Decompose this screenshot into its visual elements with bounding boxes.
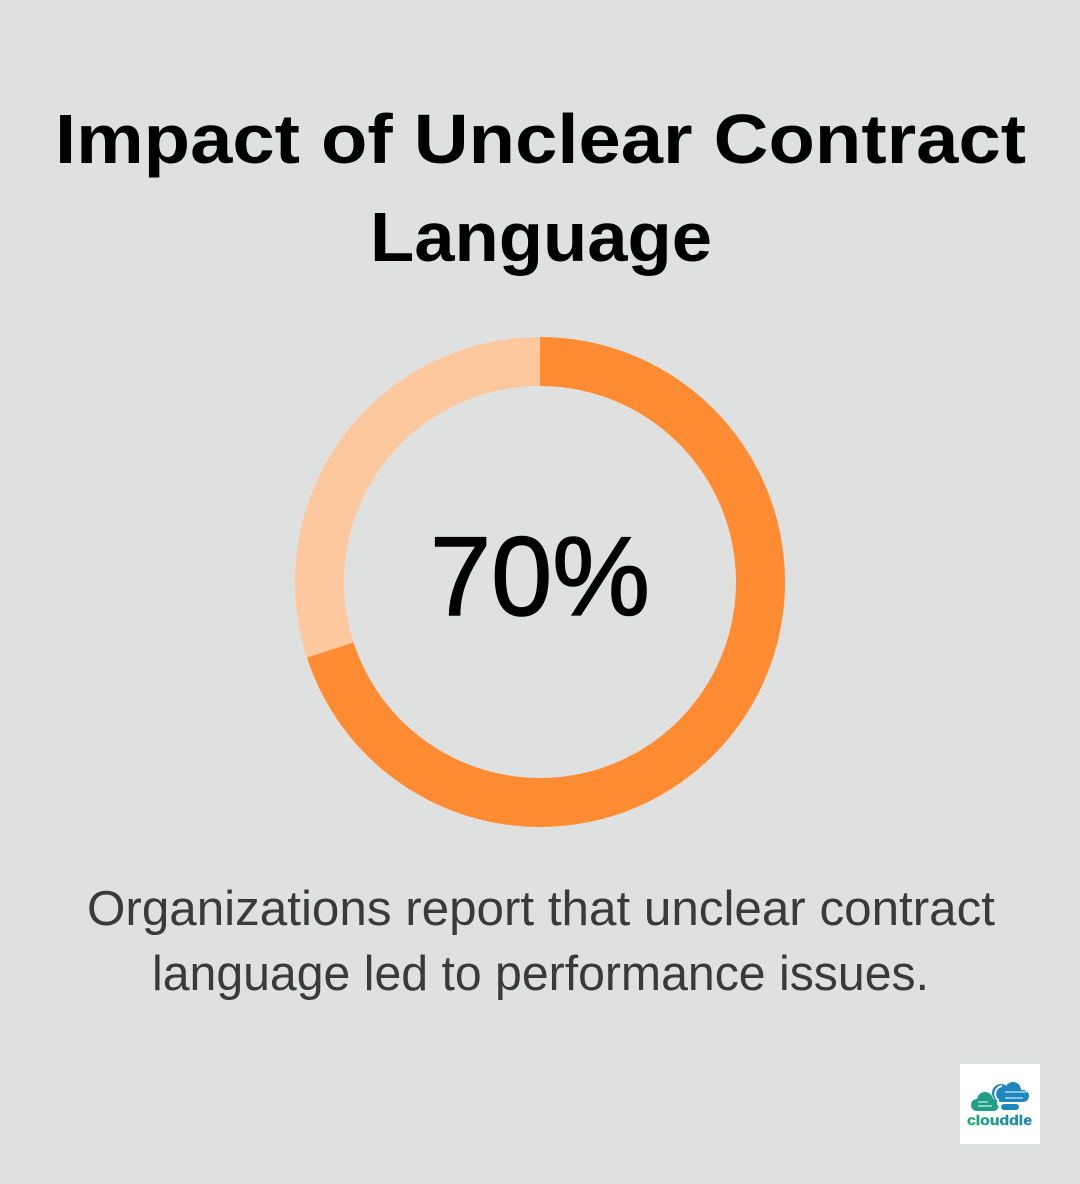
description text: language led to performance issues. bbox=[152, 947, 929, 1001]
description text: Organizations report that unclear contract bbox=[87, 882, 995, 936]
title: Language bbox=[370, 198, 712, 276]
left cloud bbox=[971, 1092, 999, 1111]
right cloud bbox=[992, 1082, 1029, 1110]
title bbox=[55, 100, 1026, 276]
logo: clouddle bbox=[960, 1064, 1040, 1144]
title: Impact of Unclear Contract bbox=[55, 100, 1026, 178]
icon: clouds bbox=[971, 1082, 1029, 1111]
donut chart: 70% bbox=[320, 362, 761, 802]
description text bbox=[87, 882, 995, 1001]
percentage value: 70% bbox=[430, 514, 650, 639]
logo wordmark: clouddle bbox=[967, 1112, 1032, 1128]
cutout curve bbox=[995, 1086, 1002, 1108]
